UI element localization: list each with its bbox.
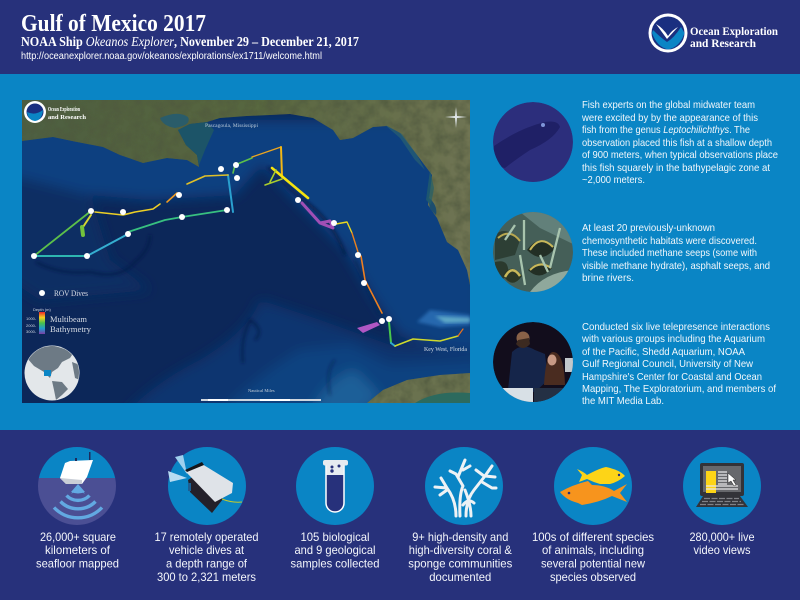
label: high-diversity coral & (409, 544, 512, 557)
label: species observed (550, 571, 636, 584)
legend: 2000- (26, 323, 37, 328)
label: 300 to 2,321 meters (157, 571, 256, 584)
logo text (690, 24, 778, 50)
header band (0, 0, 800, 74)
ROV dive markers (31, 162, 392, 324)
stat: ROV dives (154, 447, 258, 584)
multibeam tracks (34, 147, 463, 346)
scale bar (201, 388, 321, 401)
text: midwater fish: ~2,000 meters. (582, 175, 645, 186)
map logo (24, 101, 86, 123)
label: seafloor mapped (36, 558, 119, 570)
label: 26,000+ square (40, 531, 116, 544)
text: habitats (582, 223, 770, 284)
label (290, 531, 380, 570)
text: midwater fish: fish from the genus Leptochilichthys. The (582, 125, 750, 136)
footer band (0, 430, 800, 600)
scale bar: Nautical Miles (248, 388, 275, 393)
text: telepresence: Conducted six live telepresence interactions (582, 322, 770, 333)
photo: telepresence (493, 322, 574, 402)
legend: 1000- (26, 316, 37, 321)
label: and 9 geological (294, 544, 376, 557)
text: midwater fish: this fish squarely in the bathypelagic zone at (582, 163, 770, 174)
label: 100s of different species (532, 531, 654, 544)
icon: coral (435, 460, 496, 516)
legend: Multibeam (50, 314, 87, 324)
coastline land (22, 100, 470, 285)
stat: species (532, 447, 654, 584)
label: vehicle dives at (169, 544, 245, 557)
logo text: Ocean Exploration (690, 24, 778, 38)
stat: samples (290, 447, 380, 570)
label: 17 remotely operated (154, 531, 258, 544)
label: documented (429, 571, 491, 584)
map logo: and Research (48, 114, 86, 121)
place labels: Pascagoula, Mississippi (205, 123, 258, 129)
legend: ROV Dives (54, 289, 88, 298)
icon: ship and sonar (38, 447, 116, 526)
Florida Keys shelf (417, 310, 470, 327)
photo: chemosynthetic habitat (493, 212, 575, 295)
label (154, 531, 258, 584)
logo: NOAA (648, 14, 688, 52)
text: habitats: At least 20 previously-unknown (582, 223, 715, 234)
label (408, 531, 512, 584)
place labels (205, 123, 467, 353)
text: midwater fish (581, 100, 778, 186)
label: sponge communities (408, 558, 512, 570)
label: 105 biological (300, 531, 370, 544)
legend: Bathymetry (50, 324, 92, 334)
map logo: Ocean Exploration (48, 106, 80, 113)
text: telepresence: the MIT Media Lab. (582, 396, 664, 407)
text: midwater fish: were excited by by the appearance of this (581, 113, 758, 124)
legend: Depth (m) (33, 307, 51, 312)
text: telepresence: of the Pacific, Shedd Aquarium, NOAA (582, 347, 745, 358)
photo: fish (492, 102, 573, 182)
label: several potential new (541, 558, 646, 570)
label: 280,000+ live (690, 531, 754, 544)
stat: video views (683, 447, 761, 557)
logo text: and Research (690, 36, 756, 50)
text: midwater fish: of 900 meters, when typical observations place (582, 150, 778, 161)
map panel (10, 100, 480, 420)
Cuba (367, 373, 470, 403)
text: telepresence (581, 322, 776, 407)
icon: test tube (323, 460, 348, 512)
text: telepresence: with various groups including the Aquarium (581, 334, 765, 345)
label: of animals, including (542, 544, 644, 557)
label (36, 531, 119, 570)
icon: fishes (560, 467, 627, 505)
shelf waters (10, 120, 480, 420)
text: habitats: These included methane seeps (some with (582, 248, 757, 259)
text: habitats: chemosynthetic habitats were discovered. (582, 236, 757, 247)
label: samples collected (290, 558, 380, 570)
text: habitats: brine rivers. (582, 273, 634, 284)
text: habitats: visible methane hydrate), asphalt seeps, and (582, 261, 770, 272)
url: http://oceanexplorer.noaa.gov/okeanos/explorations/ex1711/welcome.html (21, 51, 322, 62)
icon: laptop (696, 463, 748, 507)
text: telepresence: Hampshire's Center for Coastal and Ocean (582, 372, 762, 383)
text: midwater fish: observation placed this fish at a shallow depth (582, 138, 772, 149)
title: Gulf of Mexico 2017 (21, 10, 206, 37)
compass (445, 107, 467, 128)
stat: coral communities (408, 447, 512, 584)
place labels: Key West, Florida (424, 347, 467, 353)
label: video views (694, 544, 751, 557)
text: telepresence: Mapping, The Exploratorium, and members of (582, 384, 776, 395)
text: midwater fish: Fish experts on the global midwater team (582, 100, 755, 111)
legend (26, 289, 92, 334)
label: a depth range of (166, 558, 248, 570)
label (532, 531, 654, 584)
label: kilometers of (45, 544, 111, 557)
label (690, 531, 754, 557)
text: telepresence: Gulf Regional Council, University of New (582, 359, 754, 370)
legend: 3000- (26, 329, 37, 334)
label: 9+ high-density and (412, 531, 508, 544)
locator globe (24, 346, 80, 400)
icon: ROV (168, 455, 242, 513)
subtitle: NOAA Ship Okeanos Explorer, November 29 – December 21, 2017 (21, 34, 359, 49)
stat: seafloor mapped (36, 447, 119, 570)
